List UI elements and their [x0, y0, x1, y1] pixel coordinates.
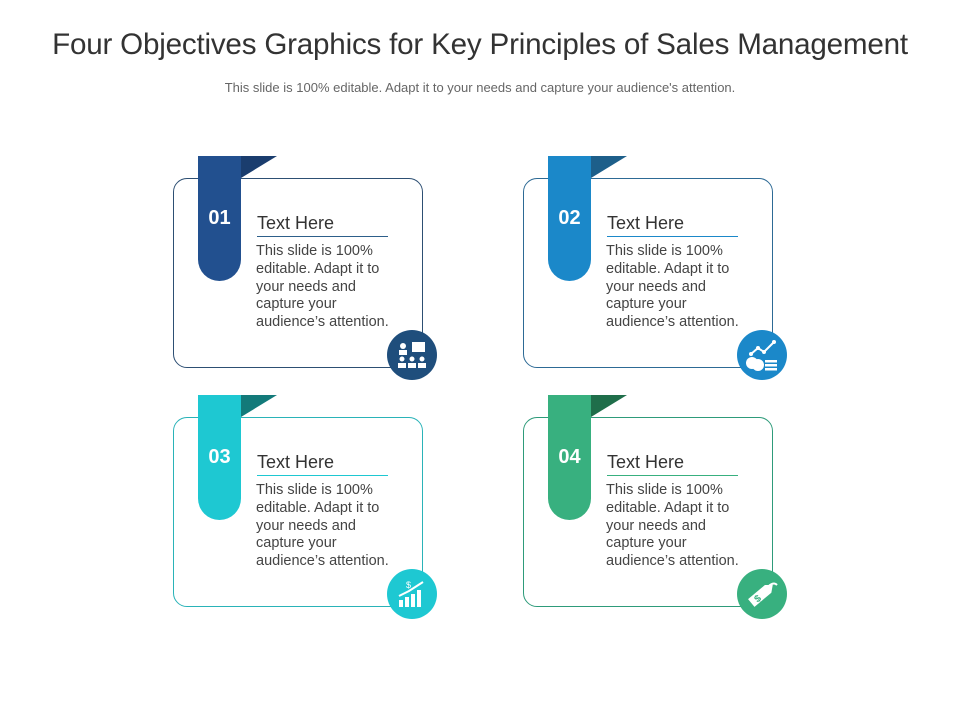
- heading: Text Here: [607, 452, 684, 472]
- heading: [257, 213, 388, 237]
- icon: price tag: [737, 569, 787, 619]
- heading: Text Here: [607, 213, 684, 233]
- body text: audience’s attention.: [606, 314, 739, 330]
- body text: audience’s attention.: [606, 553, 739, 569]
- body text: This slide is 100%: [256, 243, 373, 259]
- body text: editable. Adapt it to: [256, 261, 379, 277]
- number 02: [548, 156, 591, 281]
- body text: [256, 243, 389, 330]
- number 04: 04: [558, 446, 581, 468]
- body text: This slide is 100%: [256, 482, 373, 498]
- number 04: [548, 395, 591, 520]
- body text: your needs and: [256, 518, 356, 534]
- body text: capture your: [256, 535, 337, 551]
- body text: This slide is 100%: [606, 482, 723, 498]
- body text: editable. Adapt it to: [256, 500, 379, 516]
- body text: your needs and: [256, 279, 356, 295]
- body text: capture your: [606, 535, 687, 551]
- heading: Text Here: [257, 213, 334, 233]
- body text: [256, 482, 389, 569]
- body text: capture your: [256, 296, 337, 312]
- body text: audience’s attention.: [256, 314, 389, 330]
- heading: [257, 452, 388, 476]
- body text: your needs and: [606, 518, 706, 534]
- subtitle: This slide is 100% editable. Adapt it to your needs and capture your audience's attention.: [225, 80, 735, 95]
- title: Four Objectives Graphics for Key Principles of Sales Management: [52, 28, 908, 61]
- body text: editable. Adapt it to: [606, 261, 729, 277]
- number 03: [198, 395, 241, 520]
- number 03: 03: [208, 446, 231, 468]
- heading: [607, 452, 738, 476]
- icon: presentation: [387, 330, 437, 380]
- body text: capture your: [606, 296, 687, 312]
- body text: audience’s attention.: [256, 553, 389, 569]
- number 02: 02: [558, 207, 581, 229]
- card 01: [173, 156, 437, 380]
- number 01: [198, 156, 241, 281]
- icon: price tag: $: [753, 593, 764, 605]
- card 02: [523, 156, 787, 380]
- body text: [606, 243, 739, 330]
- card 04: [523, 395, 787, 619]
- icon: growth bars: $: [406, 580, 411, 590]
- heading: Text Here: [257, 452, 334, 472]
- heading: [607, 213, 738, 237]
- body text: This slide is 100%: [606, 243, 723, 259]
- body text: editable. Adapt it to: [606, 500, 729, 516]
- body text: [606, 482, 739, 569]
- card 03: [173, 395, 437, 619]
- icon: growth bars: [387, 569, 437, 619]
- icon: coins chart: [737, 330, 787, 380]
- body text: your needs and: [606, 279, 706, 295]
- number 01: 01: [208, 207, 231, 229]
